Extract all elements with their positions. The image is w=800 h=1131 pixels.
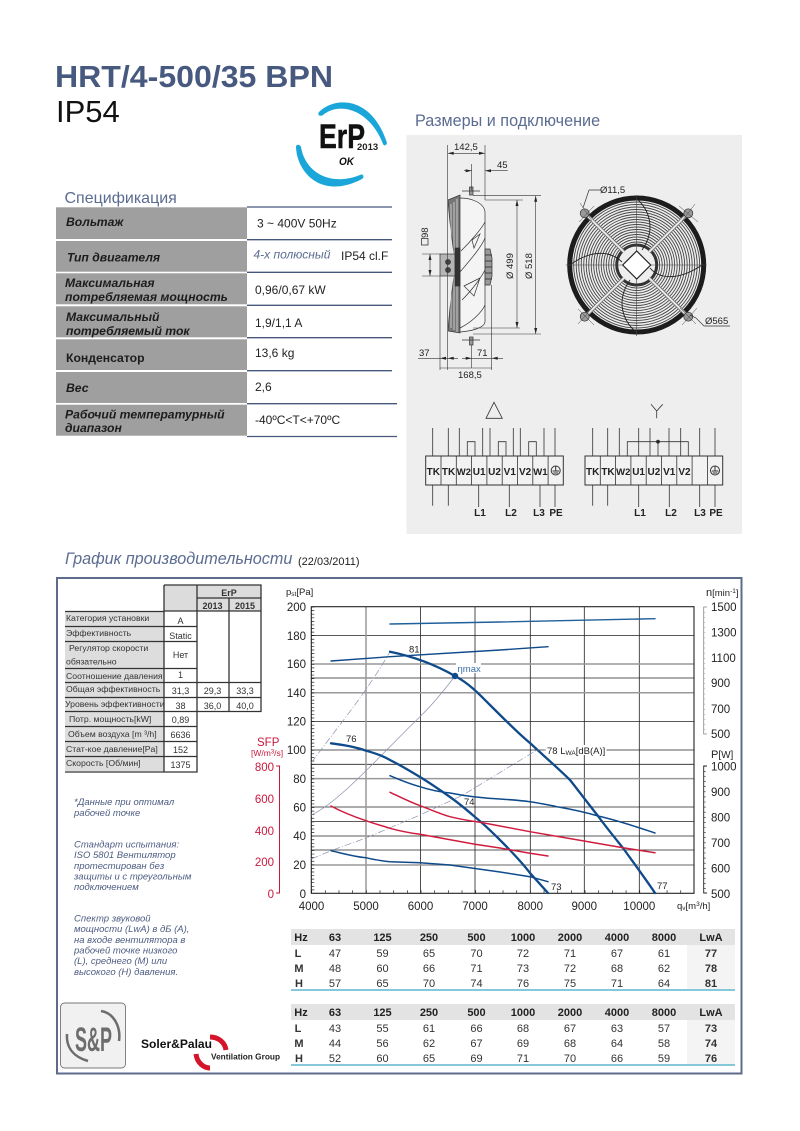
curve labels bbox=[346, 644, 668, 893]
table: sound spectrum outlet: 72 bbox=[517, 948, 529, 960]
diagram: fan side view: Ø 499 bbox=[505, 253, 516, 279]
table: sound spectrum inlet: 60 bbox=[376, 1053, 389, 1065]
chart: performance curves: [Pa] bbox=[296, 587, 313, 598]
table: sound spectrum outlet: 500 bbox=[467, 932, 486, 944]
panel: specification table: 0,96/0,67 kW bbox=[255, 283, 326, 297]
curve labels: 76 bbox=[346, 734, 357, 745]
left axis labels: 160 bbox=[287, 659, 306, 671]
table: sound spectrum inlet: 500 bbox=[467, 1007, 486, 1019]
table: ErP efficiency data: 2015 bbox=[235, 601, 255, 611]
SFP axis: 400 bbox=[255, 826, 274, 838]
table: sound spectrum inlet: 61 bbox=[423, 1023, 435, 1035]
SFP axis bbox=[251, 737, 283, 901]
text block: notes: Спектр звуковой bbox=[74, 914, 151, 925]
diagram: fan side view: 71 bbox=[477, 348, 488, 359]
icon: ErP 2013 OK badge: ErP bbox=[319, 118, 365, 156]
text block: notes: высокого (Н) давления. bbox=[74, 967, 178, 978]
diagram: star wiring: PE bbox=[709, 508, 723, 519]
diagram: fan side view bbox=[418, 142, 541, 381]
table: sound spectrum outlet: 78 bbox=[705, 963, 717, 975]
curve labels: 78 L bbox=[547, 746, 566, 757]
SFP axis: SFP bbox=[257, 737, 280, 749]
SFP axis: 800 bbox=[255, 762, 274, 774]
diagram: delta wiring: V1 bbox=[504, 467, 516, 478]
table: ErP efficiency data: 38 bbox=[175, 701, 186, 711]
table: sound spectrum outlet: 71 bbox=[564, 948, 576, 960]
table: ErP efficiency data: Объем воздуха [m ³/h] bbox=[68, 729, 157, 739]
fan curves bbox=[331, 619, 655, 893]
panel: specification table: IP54 cl.F bbox=[341, 249, 388, 263]
table: sound spectrum inlet: 71 bbox=[517, 1053, 529, 1065]
table: sound spectrum inlet: 68 bbox=[517, 1023, 529, 1035]
chart: performance curves: /h] bbox=[700, 901, 710, 912]
diagram: star wiring: U2 bbox=[648, 467, 661, 478]
table: sound spectrum outlet: 65 bbox=[376, 978, 389, 990]
table: ErP efficiency data: A bbox=[177, 616, 184, 626]
power axis: 600 bbox=[711, 864, 730, 876]
table: sound spectrum outlet: 73 bbox=[517, 963, 529, 975]
table: sound spectrum inlet: 52 bbox=[329, 1053, 341, 1065]
left axis labels: 140 bbox=[287, 688, 306, 700]
diagram: delta wiring bbox=[426, 402, 563, 519]
table: ErP efficiency data: Стат-кое давление[Pa] bbox=[66, 744, 158, 754]
diagram: fan front view bbox=[566, 185, 730, 336]
table: ErP efficiency data: Общая эффективность bbox=[66, 684, 161, 694]
table: ErP efficiency data: 1375 bbox=[170, 760, 191, 770]
heading: performance chart: (22/03/2011) bbox=[298, 556, 360, 568]
table: sound spectrum outlet: 61 bbox=[658, 948, 670, 960]
curve labels: ηmax bbox=[458, 664, 481, 675]
text block: notes: *Данные при оптимал bbox=[74, 797, 175, 808]
text block: notes: Стандарт испытания: bbox=[74, 840, 179, 850]
chart: performance curves: v bbox=[682, 905, 686, 912]
panel: dimensions and wiring background bbox=[406, 135, 742, 534]
logo: Soler&Palau Ventilation Group bbox=[141, 1037, 280, 1068]
table: ErP efficiency data: ErP bbox=[221, 588, 237, 598]
table: ErP efficiency data: Скорость [Об/мин] bbox=[66, 758, 141, 768]
left axis labels: 200 bbox=[287, 602, 306, 614]
diagram: delta wiring: L3 bbox=[533, 508, 545, 519]
table: sound spectrum inlet: 55 bbox=[376, 1023, 389, 1035]
diagram: fan side view: 168,5 bbox=[458, 370, 482, 381]
speed axis: 1300 bbox=[711, 628, 737, 640]
table: sound spectrum outlet: 72 bbox=[564, 963, 576, 975]
table: sound spectrum inlet: 125 bbox=[373, 1007, 392, 1019]
logo: S&P bbox=[60, 1003, 126, 1068]
diagram: delta wiring: TK bbox=[442, 467, 456, 478]
panel: specification table: потребляемая мощность bbox=[65, 290, 228, 304]
chart: performance curves: q bbox=[677, 901, 682, 912]
title: IP54 bbox=[56, 94, 120, 129]
table: sound spectrum outlet: 66 bbox=[423, 963, 435, 975]
panel: specification table: 2,6 bbox=[255, 380, 272, 394]
table: sound spectrum outlet: 81 bbox=[705, 978, 717, 990]
panel: specification table: диапазон bbox=[65, 421, 122, 435]
left axis labels: 120 bbox=[287, 716, 306, 728]
speed axis bbox=[704, 587, 738, 741]
diagram: fan side view: Ø 518 bbox=[524, 253, 535, 279]
diagram: fan front view: Ø11,5 bbox=[600, 185, 625, 196]
left axis labels bbox=[287, 602, 306, 901]
diagram: star wiring: V2 bbox=[678, 467, 691, 478]
SFP axis: 200 bbox=[255, 857, 274, 869]
panel: specification table: Тип двигателя bbox=[67, 251, 160, 265]
table: sound spectrum inlet: 64 bbox=[611, 1038, 623, 1050]
diagram: delta wiring: V2 bbox=[519, 467, 532, 478]
heading: dimensions and connection: Размеры и подключение bbox=[415, 112, 600, 130]
power axis: 700 bbox=[711, 838, 730, 850]
table: sound spectrum inlet: 56 bbox=[376, 1038, 389, 1050]
table: sound spectrum outlet: 71 bbox=[611, 978, 623, 990]
left axis labels: 180 bbox=[287, 631, 306, 643]
curve labels: 73 bbox=[551, 882, 562, 893]
table: sound spectrum outlet: L bbox=[295, 948, 302, 960]
diagram: fan side view: 98 bbox=[420, 227, 431, 238]
diagram: star wiring: L1 bbox=[634, 508, 646, 519]
speed axis: ] bbox=[736, 588, 738, 599]
table: sound spectrum outlet: H bbox=[295, 978, 303, 990]
left axis labels: 60 bbox=[293, 802, 306, 814]
text block: notes: протестирован без bbox=[74, 861, 165, 872]
table: sound spectrum outlet: 60 bbox=[376, 963, 389, 975]
table: ErP efficiency data: Static bbox=[169, 631, 192, 641]
panel: performance chart frame bbox=[57, 578, 742, 1074]
table: sound spectrum inlet: 65 bbox=[423, 1053, 435, 1065]
table: sound spectrum inlet: 4000 bbox=[605, 1007, 629, 1019]
table: sound spectrum outlet: 47 bbox=[329, 948, 341, 960]
diagram: star wiring bbox=[585, 404, 723, 519]
table: sound spectrum inlet: 73 bbox=[705, 1023, 717, 1035]
curve labels: 77 bbox=[657, 881, 668, 892]
table: sound spectrum outlet: 77 bbox=[705, 948, 717, 960]
text block: notes: рабочей точке bbox=[73, 808, 140, 819]
table: sound spectrum outlet: 125 bbox=[373, 932, 392, 944]
table: sound spectrum outlet bbox=[291, 929, 735, 990]
text block: notes: защиты и с треугольным bbox=[73, 872, 192, 882]
speed axis: 1100 bbox=[711, 653, 736, 665]
diagram: fan side view: 37 bbox=[419, 348, 430, 359]
table: sound spectrum inlet: 8000 bbox=[652, 1007, 676, 1019]
table: sound spectrum inlet: M bbox=[294, 1038, 304, 1050]
table: sound spectrum outlet: 64 bbox=[658, 978, 670, 990]
title bbox=[55, 60, 333, 129]
diagram: star wiring: TK bbox=[586, 467, 600, 478]
curve labels: [dB(A)] bbox=[576, 746, 605, 757]
icon: ErP 2013 OK badge: OK bbox=[339, 156, 355, 168]
text block: notes: (L), среднего (М) или bbox=[74, 956, 168, 967]
bottom axis labels: 7000 bbox=[462, 901, 488, 913]
table: ErP efficiency data: Категория установки bbox=[66, 613, 149, 623]
table: sound spectrum inlet: 69 bbox=[470, 1053, 483, 1065]
table: sound spectrum inlet: 76 bbox=[705, 1053, 717, 1065]
logo: Soler&Palau Ventilation Group: Ventilation Group bbox=[211, 1052, 280, 1062]
power axis: 1000 bbox=[711, 762, 737, 774]
diagram: delta wiring: U1 bbox=[473, 467, 486, 478]
table: sound spectrum outlet: 1000 bbox=[511, 932, 535, 944]
logo: Soler&Palau Ventilation Group: Soler&Palau bbox=[141, 1039, 212, 1051]
table: ErP efficiency data: Соотношение давления bbox=[66, 671, 163, 681]
table: ErP efficiency data: 33,3 bbox=[236, 686, 254, 696]
table: ErP efficiency data: Регулятор скорости bbox=[69, 643, 148, 653]
curve labels: WA bbox=[566, 750, 576, 757]
panel: specification table: 13,6 kg bbox=[255, 346, 294, 360]
text block: notes: ISO 5801 Вентилятор bbox=[74, 850, 176, 861]
table: sound spectrum inlet: 1000 bbox=[511, 1007, 535, 1019]
bottom axis labels: 10000 bbox=[623, 901, 655, 913]
panel: specification table: 1,9/1,1 A bbox=[255, 316, 302, 330]
table: sound spectrum outlet: 65 bbox=[423, 948, 435, 960]
table: sound spectrum outlet: LwA bbox=[699, 932, 723, 944]
table: sound spectrum inlet: LwA bbox=[699, 1007, 723, 1019]
diagram: star wiring: U1 bbox=[632, 467, 645, 478]
panel: specification table bbox=[56, 207, 397, 436]
chart: performance curves: 3 bbox=[696, 901, 700, 908]
panel: specification table: 3 ~ 400V 50Hz bbox=[257, 217, 337, 231]
table: sound spectrum outlet: 8000 bbox=[652, 932, 676, 944]
table: sound spectrum outlet: 70 bbox=[470, 948, 483, 960]
diagram: delta wiring: PE bbox=[549, 508, 563, 519]
table: ErP efficiency data: 36,0 bbox=[204, 701, 221, 711]
SFP axis: 600 bbox=[255, 794, 274, 806]
diagram: star wiring: L2 bbox=[665, 508, 677, 519]
table: sound spectrum inlet: 62 bbox=[423, 1038, 435, 1050]
logo: S&P: S&P bbox=[75, 1021, 112, 1059]
table: sound spectrum inlet: Hz bbox=[294, 1007, 308, 1019]
diagram: star wiring: L3 bbox=[694, 508, 706, 519]
icon: ErP 2013 OK badge: 2013 bbox=[357, 142, 378, 153]
table: sound spectrum outlet: M bbox=[294, 963, 304, 975]
table: ErP efficiency data: 31,3 bbox=[172, 686, 189, 696]
curve labels: 81 bbox=[409, 644, 420, 656]
table: sound spectrum outlet: 75 bbox=[564, 978, 576, 990]
table: ErP efficiency data: Эффективность bbox=[66, 628, 132, 638]
table: sound spectrum inlet: 250 bbox=[420, 1007, 438, 1019]
table: sound spectrum outlet: 74 bbox=[470, 978, 483, 990]
speed axis: 700 bbox=[711, 704, 730, 716]
panel: specification table: Максимальный bbox=[66, 310, 160, 324]
bottom axis labels bbox=[299, 901, 655, 913]
speed axis: -1 bbox=[730, 588, 736, 595]
SFP axis: 0 bbox=[268, 889, 274, 901]
table: sound spectrum inlet: 58 bbox=[658, 1038, 670, 1050]
table: sound spectrum inlet: 67 bbox=[470, 1038, 483, 1050]
title: HRT/4-500/35 BPN bbox=[55, 60, 333, 94]
table: sound spectrum inlet: 63 bbox=[329, 1007, 341, 1019]
chart: performance curves: [m bbox=[686, 901, 696, 912]
table: sound spectrum inlet: 74 bbox=[705, 1038, 718, 1050]
speed axis: 1500 bbox=[711, 602, 737, 614]
bottom axis labels: 5000 bbox=[353, 901, 379, 913]
power axis: 900 bbox=[711, 787, 730, 799]
left axis labels: 40 bbox=[293, 831, 306, 843]
table: ErP efficiency data: 1 bbox=[178, 670, 183, 680]
text block: notes: мощности (LwA) в дБ (А), bbox=[74, 924, 189, 935]
panel: specification table: Максимальная bbox=[65, 276, 155, 290]
panel: specification table: Вес bbox=[66, 381, 89, 395]
panel: specification table: 4-х полюсный bbox=[254, 248, 331, 262]
table: ErP efficiency data: 0,89 bbox=[172, 715, 189, 725]
table: sound spectrum inlet: 66 bbox=[611, 1053, 623, 1065]
table: ErP efficiency data: Уровень эффективности bbox=[65, 699, 165, 709]
icon: ErP 2013 OK badge bbox=[296, 102, 387, 187]
table: sound spectrum outlet: 48 bbox=[329, 963, 341, 975]
table: sound spectrum outlet: 70 bbox=[423, 978, 435, 990]
diagram: fan side view: 142,5 bbox=[454, 142, 478, 153]
system lines bbox=[311, 652, 537, 859]
table: ErP efficiency data: 152 bbox=[173, 745, 188, 755]
table: sound spectrum inlet: L bbox=[295, 1023, 302, 1035]
table: sound spectrum outlet: 4000 bbox=[605, 932, 629, 944]
table: sound spectrum outlet: 2000 bbox=[558, 932, 582, 944]
table: sound spectrum outlet: 250 bbox=[420, 932, 438, 944]
panel: specification table: Конденсатор bbox=[66, 351, 145, 365]
table: sound spectrum inlet: 44 bbox=[329, 1038, 341, 1050]
diagram: star wiring: V1 bbox=[663, 467, 676, 478]
panel: specification table: потребляемый ток bbox=[66, 324, 190, 338]
curve labels: 74 bbox=[464, 797, 475, 808]
table: sound spectrum inlet: 63 bbox=[611, 1023, 623, 1035]
table: sound spectrum inlet bbox=[291, 1004, 735, 1065]
table: sound spectrum inlet: 67 bbox=[564, 1023, 576, 1035]
table: sound spectrum outlet: 63 bbox=[329, 932, 341, 944]
table: ErP efficiency data: Потр. мощность[kW] bbox=[69, 714, 151, 724]
table: sound spectrum outlet: 76 bbox=[517, 978, 529, 990]
bottom axis labels: 4000 bbox=[299, 901, 324, 913]
table: ErP efficiency data: 29,3 bbox=[204, 686, 221, 696]
heading: performance chart: График производительности bbox=[65, 550, 292, 568]
bottom axis labels: 6000 bbox=[408, 901, 433, 913]
table: sound spectrum inlet: 69 bbox=[517, 1038, 529, 1050]
diagram: delta wiring: TK bbox=[427, 467, 441, 478]
panel: specification table: -40ºC<T<+70ºC bbox=[255, 413, 340, 427]
table: sound spectrum outlet: 59 bbox=[376, 948, 389, 960]
text block: notes bbox=[73, 797, 192, 978]
table: sound spectrum outlet: 57 bbox=[329, 978, 341, 990]
panel: specification table: Вольтаж bbox=[66, 215, 124, 229]
SFP axis: /s] bbox=[274, 748, 283, 758]
diagram: fan side view: 45 bbox=[497, 160, 508, 171]
speed axis: 500 bbox=[711, 729, 730, 741]
table: sound spectrum inlet: 59 bbox=[658, 1053, 670, 1065]
table: sound spectrum inlet: H bbox=[295, 1053, 303, 1065]
text block: notes: рабочей точке низкого bbox=[73, 946, 177, 957]
table: ErP efficiency data: 6636 bbox=[170, 730, 191, 740]
table: sound spectrum outlet: 71 bbox=[470, 963, 483, 975]
table: ErP efficiency data: 40,0 bbox=[236, 701, 254, 711]
diagram: star wiring: TK bbox=[601, 467, 615, 478]
table: ErP efficiency data: обязательно bbox=[66, 656, 117, 666]
diagram: fan front view: Ø565 bbox=[705, 316, 728, 327]
left axis labels: 100 bbox=[287, 745, 306, 757]
power axis bbox=[704, 749, 737, 901]
SFP axis: 3 bbox=[271, 750, 275, 756]
diagram: delta wiring: U2 bbox=[488, 467, 501, 478]
table: sound spectrum inlet: 70 bbox=[564, 1053, 576, 1065]
table: sound spectrum inlet: 68 bbox=[564, 1038, 576, 1050]
power axis: P[W] bbox=[711, 749, 734, 761]
diagram: delta wiring: L1 bbox=[474, 508, 486, 519]
chart: performance curves bbox=[251, 587, 738, 913]
power axis: 800 bbox=[711, 812, 730, 824]
table: sound spectrum outlet: Hz bbox=[294, 932, 308, 944]
diagram: star wiring: W2 bbox=[616, 467, 630, 478]
diagram: delta wiring: L2 bbox=[505, 508, 517, 519]
diagram: delta wiring: W1 bbox=[533, 467, 548, 478]
power curves bbox=[331, 792, 655, 856]
diagram: delta wiring: W2 bbox=[457, 467, 471, 478]
SFP axis: [W/m bbox=[251, 748, 271, 758]
left axis labels: 0 bbox=[300, 889, 306, 901]
table: ErP efficiency data: 2013 bbox=[202, 601, 223, 611]
panel: specification table: Рабочий температурный bbox=[65, 408, 225, 422]
bottom axis labels: 8000 bbox=[518, 901, 543, 913]
text block: notes: подключением bbox=[74, 882, 139, 893]
table: sound spectrum outlet: 67 bbox=[611, 948, 623, 960]
table: sound spectrum inlet: 43 bbox=[329, 1023, 341, 1035]
speed axis: n[min bbox=[706, 587, 730, 599]
speed axis: 900 bbox=[711, 678, 730, 690]
table: sound spectrum inlet: 2000 bbox=[558, 1007, 582, 1019]
left axis labels: 20 bbox=[293, 860, 306, 872]
table: sound spectrum inlet: 57 bbox=[658, 1023, 670, 1035]
table: ErP efficiency data: Нет bbox=[173, 650, 188, 660]
table: sound spectrum inlet: 66 bbox=[470, 1023, 483, 1035]
table: sound spectrum outlet: 68 bbox=[611, 963, 623, 975]
chart: performance curves: st bbox=[291, 591, 297, 598]
bottom axis labels: 9000 bbox=[572, 901, 597, 913]
left axis labels: 80 bbox=[293, 774, 306, 786]
power axis: 500 bbox=[711, 889, 730, 901]
chart: performance curves: p bbox=[286, 587, 291, 598]
heading: specification: Спецификация bbox=[64, 190, 177, 207]
table: ErP efficiency data bbox=[65, 585, 261, 772]
text block: notes: на входе вентилятора в bbox=[74, 935, 185, 946]
table: sound spectrum outlet: 62 bbox=[658, 963, 670, 975]
